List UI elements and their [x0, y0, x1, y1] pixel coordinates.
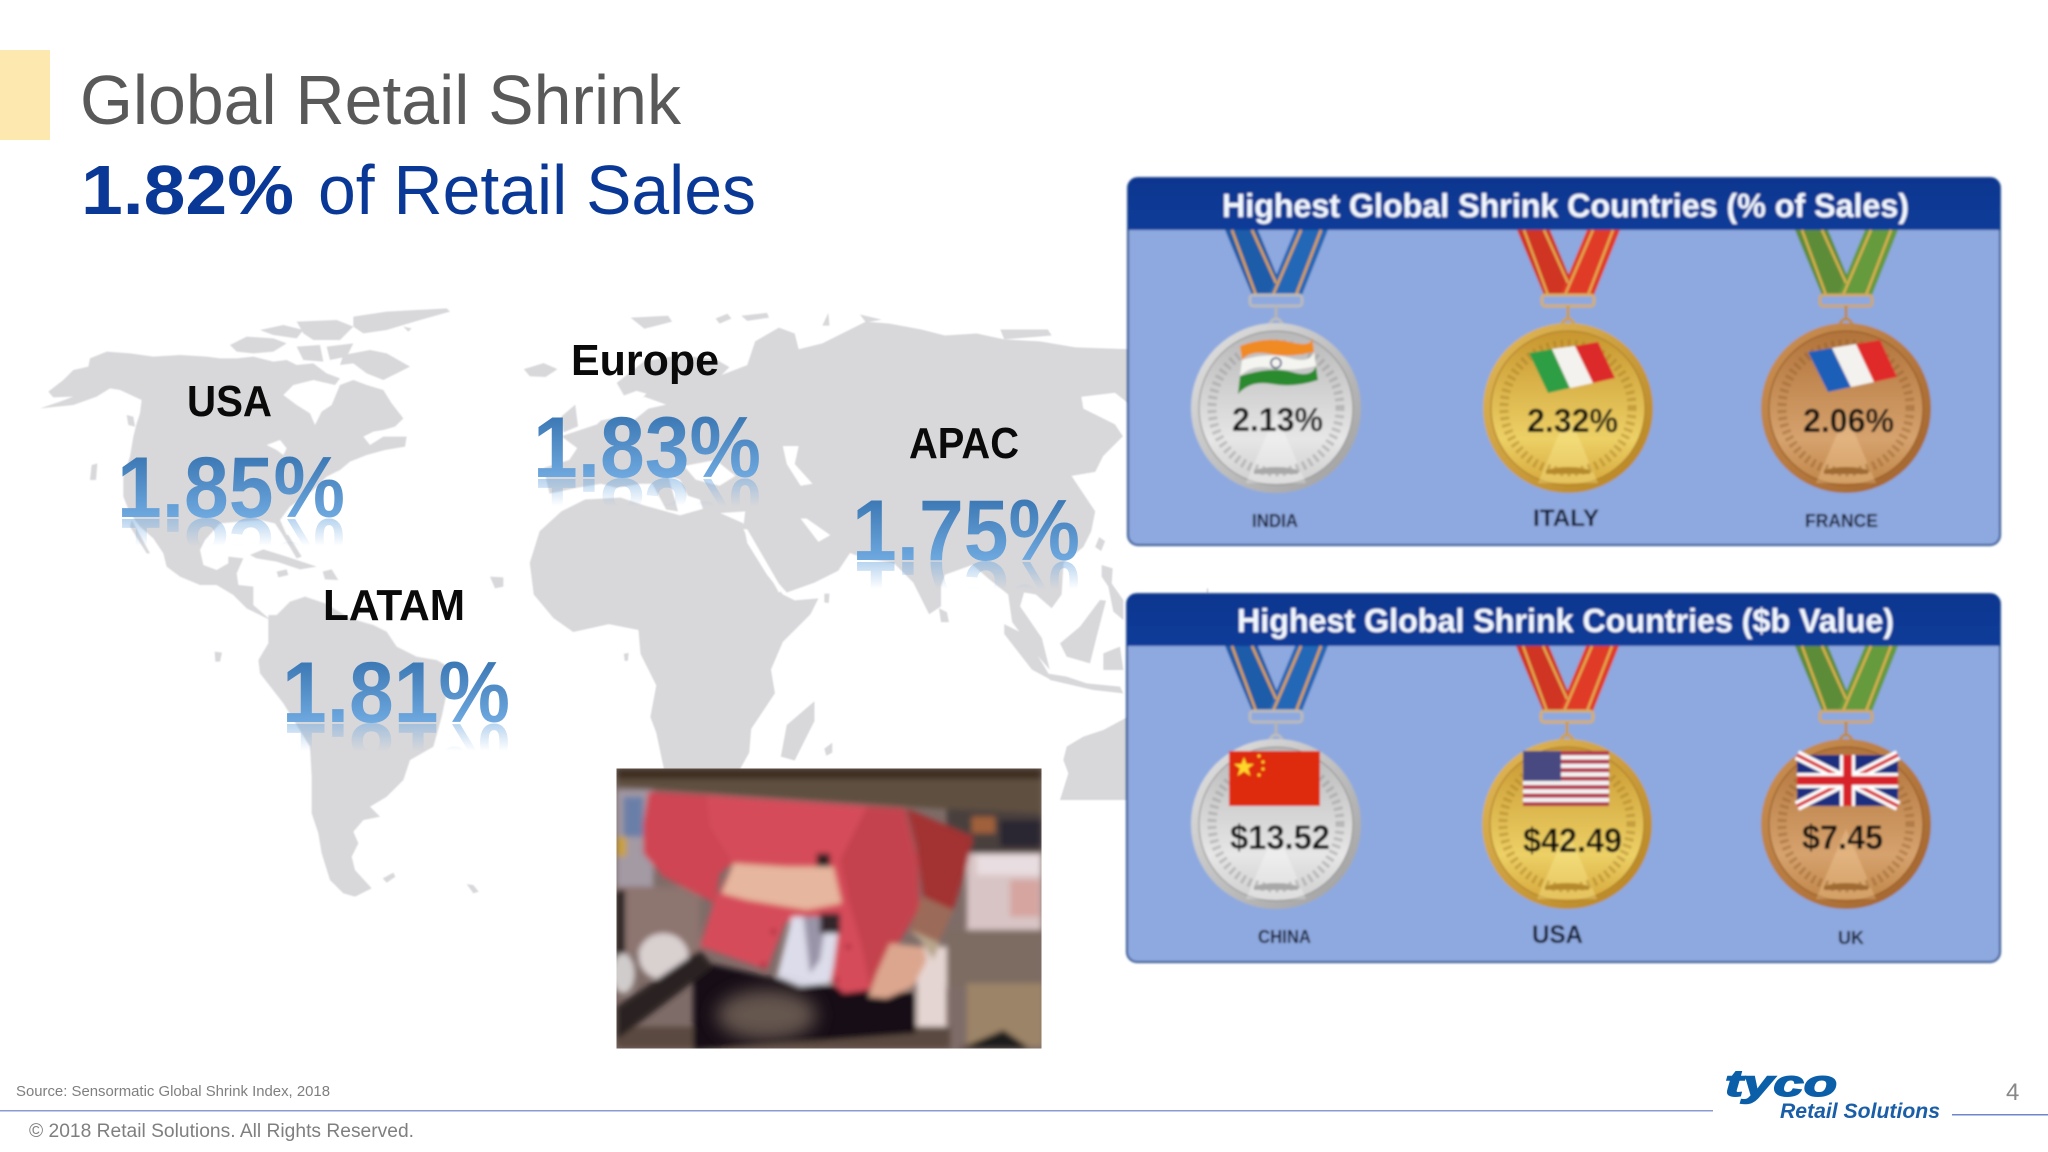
footer rule right [1952, 1114, 2048, 1116]
region: Europe: 1.83% [533, 400, 761, 496]
panel header: dollar value: Highest Global Shrink Countries ($b Value) [1237, 602, 1894, 639]
medal: India [1191, 230, 1361, 493]
region: LATAM: 1.81% [282, 645, 510, 741]
region: LATAM [282, 581, 510, 801]
photo: shoplifter hiding goods under cardigan [612, 768, 1043, 1050]
medal: Italy: 2.32% [1527, 402, 1618, 439]
label: China: CHINA [1258, 927, 1311, 947]
medal: USA [1482, 646, 1652, 909]
region: USA [117, 377, 345, 596]
medal: UK: $7.45 [1802, 819, 1883, 857]
logo: tyco Retail Solutions: tyco [1725, 1063, 1837, 1104]
region: Europe: 1.83% [533, 460, 761, 556]
panel: shrink by percent of sales [1128, 178, 2000, 545]
region: LATAM: 1.81% [282, 705, 510, 801]
medal: India: 2.13% [1232, 401, 1323, 438]
region: USA: USA [187, 377, 272, 426]
panel header: dollar value [1127, 594, 2000, 646]
region: USA: 1.85% [117, 440, 345, 536]
map: Africa, Eurasia and islands [524, 313, 1130, 770]
map: South America [258, 597, 479, 897]
label: USA: USA [1532, 921, 1583, 949]
medal: France [1761, 230, 1931, 493]
footer rule left [0, 1110, 1713, 1112]
panel header: percent of sales [1128, 178, 2000, 230]
map: Southeast Asia islands and Australia [1047, 565, 1208, 800]
source note: Source: Sensormatic Global Shrink Index, 2018 [16, 1083, 330, 1100]
region: APAC [852, 419, 1080, 639]
title: Global Retail Shrink [80, 61, 682, 139]
world map [40, 308, 1208, 897]
region: USA: 1.85% [117, 500, 345, 596]
region: APAC: APAC [909, 419, 1019, 468]
subtitle: global shrink rate: of Retail Sales [318, 151, 756, 229]
map: North and Central America [40, 308, 503, 662]
region: Europe [533, 336, 761, 556]
medal: Italy [1483, 230, 1653, 493]
medal: China [1191, 646, 1361, 909]
copyright: © 2018 Retail Solutions. All Rights Reserved. [29, 1121, 414, 1142]
label: France: FRANCE [1805, 511, 1878, 531]
label: India: INDIA [1252, 511, 1298, 531]
subtitle: global shrink rate [81, 151, 756, 229]
medal: UK [1761, 646, 1931, 909]
logo: tyco Retail Solutions [1725, 1063, 1940, 1123]
accent block [0, 50, 50, 140]
region: Europe: Europe [571, 336, 719, 385]
region: APAC: 1.75% [852, 543, 1080, 639]
region: LATAM: LATAM [323, 581, 465, 630]
region: APAC: 1.75% [852, 483, 1080, 579]
subtitle: global shrink rate: 1.82% [81, 151, 294, 229]
page number: 4 [2006, 1079, 2019, 1106]
medal: France: 2.06% [1803, 402, 1894, 439]
medal: China: $13.52 [1230, 819, 1330, 857]
panel: shrink by dollar value [1127, 594, 2000, 962]
panel header: percent of sales: Highest Global Shrink Countries (% of Sales) [1222, 187, 1909, 224]
logo: tyco Retail Solutions: Retail Solutions [1780, 1100, 1940, 1123]
medal: USA: $42.49 [1523, 822, 1622, 860]
label: UK: UK [1838, 928, 1864, 948]
label: Italy: ITALY [1533, 505, 1599, 532]
